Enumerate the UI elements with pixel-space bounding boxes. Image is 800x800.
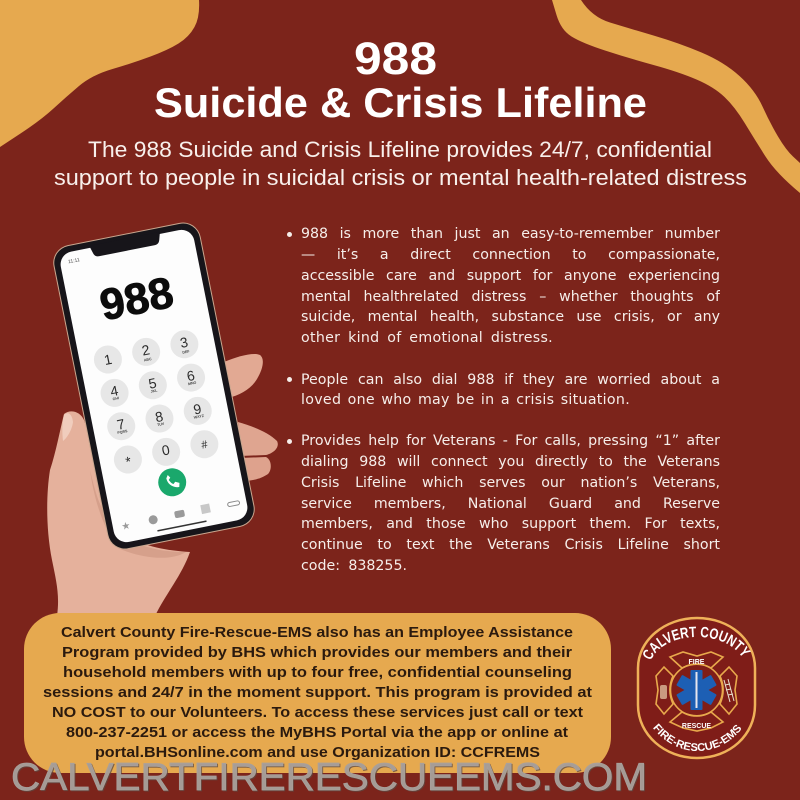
keypad letters: TUV xyxy=(157,422,165,427)
key circles xyxy=(91,328,221,476)
home indicator xyxy=(157,520,207,532)
watermark: CALVERTFIRERESCUEEMS.COM xyxy=(12,757,648,800)
bullet one: other kind of emotional distress. xyxy=(301,330,553,346)
badge star of life xyxy=(676,670,717,710)
badge ladder icon xyxy=(724,679,734,702)
title xyxy=(154,33,647,126)
bullet three: members, and those who support them. For texts, xyxy=(301,516,720,532)
badge text xyxy=(643,626,751,751)
keypad letters: DEF xyxy=(182,349,191,355)
bullet three: Provides help for Veterans - For calls, pressing “1” after xyxy=(301,433,720,449)
keypad digits: 1 xyxy=(103,351,114,368)
keypad letters xyxy=(104,349,205,435)
keypad letters: JKL xyxy=(150,388,159,394)
lower finger xyxy=(240,457,271,481)
bullet one: mental healthrelated distress – whether thoughts of xyxy=(301,289,720,305)
keypad digits: 3 xyxy=(179,334,190,351)
badge cross xyxy=(656,652,737,731)
bullet one: 988 is more than just an easy-to-remember number xyxy=(301,226,720,242)
subtitle: support to people in suicidal crisis or mental health-related distress xyxy=(54,165,747,190)
call button xyxy=(156,466,189,499)
title: 988 xyxy=(354,33,437,84)
status bar time: 11:11 xyxy=(68,257,81,265)
subtitle xyxy=(54,137,747,190)
keypad xyxy=(91,328,221,476)
panel text: Program provided by BHS which provides our members and their xyxy=(62,645,572,661)
keypad letters: PQRS xyxy=(117,429,128,435)
badge text: RESCUE xyxy=(682,723,711,730)
panel text: sessions and 24/7 in the moment support. This program is provided at xyxy=(43,685,592,701)
notch xyxy=(89,232,162,258)
keypad digits: 7 xyxy=(115,416,126,433)
bullet two: loved one who may be in a crisis situation. xyxy=(301,392,630,408)
keypad digits: 0 xyxy=(160,441,171,459)
upper finger xyxy=(224,354,263,398)
keypad letters: WXYZ xyxy=(193,414,205,420)
thumb nail xyxy=(62,413,73,441)
watermark: CALVERTFIRERESCUEEMS.COM xyxy=(11,756,647,799)
bullet three xyxy=(287,433,720,574)
panel: employee assistance program xyxy=(24,613,611,773)
bullet two xyxy=(287,372,720,408)
bullet one: accessible care and support for anyone experiencing xyxy=(301,268,720,284)
badge text: CALVERT COUNTY xyxy=(643,626,751,659)
keypad digits: 5 xyxy=(147,375,158,392)
logo: Calvert County Fire-Rescue-EMS badge xyxy=(636,616,756,760)
badge shield xyxy=(638,618,755,758)
bullet one: suicide, mental health, substance use crisis, or any xyxy=(301,309,720,325)
badge hydrant icon xyxy=(660,685,667,699)
keypad letters: GHI xyxy=(112,396,119,401)
keypad digits: 4 xyxy=(109,382,120,400)
panel text xyxy=(43,625,592,761)
keypad digits xyxy=(102,334,210,470)
bullet three: code: 838255. xyxy=(301,558,407,574)
keypad letters: ABC xyxy=(144,357,152,362)
phone screen xyxy=(58,228,250,544)
keypad letters: MNO xyxy=(188,381,197,386)
badge text: FIRE-RESCUE-EMS xyxy=(653,723,741,751)
dialed number: 988 xyxy=(96,268,177,330)
badge staff xyxy=(696,672,698,708)
tab bar icons xyxy=(120,498,241,533)
panel text: 800-237-2251 or access the MyBHS Portal via the app or online at xyxy=(66,725,568,741)
badge text: FIRE xyxy=(689,659,705,666)
subtitle: The 988 Suicide and Crisis Lifeline provides 24/7, confidential xyxy=(88,137,712,162)
bullet three: Crisis Lifeline which serves our nation’s Veterans, xyxy=(301,475,720,491)
middle finger xyxy=(238,422,278,456)
blob: top-right gold ribbon xyxy=(552,0,800,193)
bullet two: People can also dial 988 if they are worried about a xyxy=(301,372,720,388)
bullet three: dialing 988 will connect you directly to the Veterans xyxy=(301,454,720,470)
panel text: Calvert County Fire-Rescue-EMS also has an Employee Assistance xyxy=(61,625,573,641)
phone xyxy=(50,219,258,553)
blob: top-left gold shape xyxy=(0,0,199,147)
bullet three: service members, National Guard and Reserve xyxy=(301,496,720,512)
keypad digits: 2 xyxy=(140,341,151,359)
phone frame xyxy=(50,219,258,553)
palm shading xyxy=(90,470,186,558)
tab bar icons: ★ xyxy=(121,520,132,533)
bullet one: — it’s a direct connection to compassionate, xyxy=(301,247,720,263)
keypad digits: 6 xyxy=(185,367,196,384)
panel text: NO COST to our Volunteers. To access these services just call or text xyxy=(52,705,583,721)
keypad digits: # xyxy=(200,439,210,452)
bullet three: continue to text the Veterans Crisis Lifeline short xyxy=(301,537,720,553)
keypad digits: 9 xyxy=(192,400,203,418)
panel text: household members with up to four free, confidential counseling xyxy=(63,665,572,681)
keypad digits: * xyxy=(124,453,133,470)
palm and thumb xyxy=(47,411,190,616)
keypad digits: 8 xyxy=(154,408,165,425)
title: Suicide & Crisis Lifeline xyxy=(154,79,647,126)
panel text: portal.BHSonline.com and use Organization ID: CCFREMS xyxy=(95,745,540,761)
bullet one xyxy=(287,226,720,346)
hand holding phone xyxy=(47,354,278,616)
